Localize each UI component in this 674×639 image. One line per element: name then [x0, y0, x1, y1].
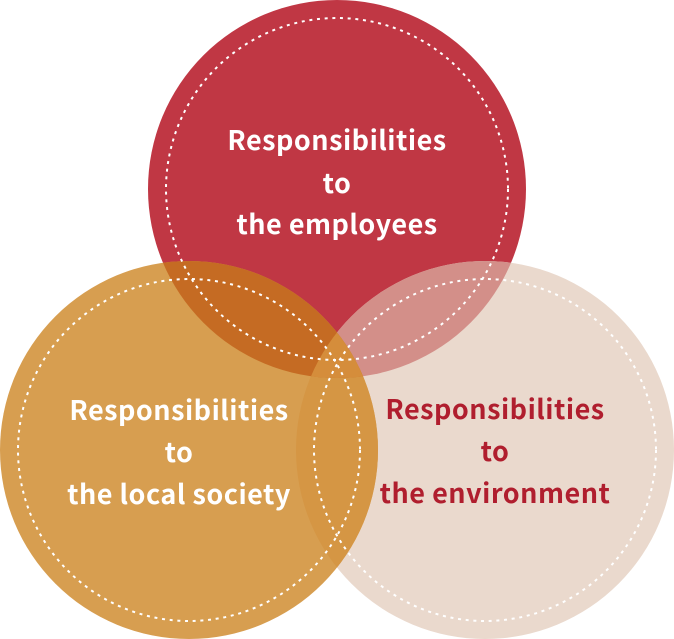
label: employees [227, 119, 447, 242]
overlap: employees and environment [337, 261, 511, 376]
label: environment [380, 388, 610, 511]
label: employees: Responsibilities [227, 119, 447, 158]
overlap: employees and local society [163, 261, 363, 378]
label: local society: the local society [67, 473, 291, 512]
label: environment: Responsibilities [385, 388, 605, 427]
label: employees: the employees [236, 203, 438, 242]
label: local society [67, 389, 291, 512]
dotted ring: local society [18, 279, 360, 621]
overlap: local society and environment [296, 376, 378, 568]
label: environment: the environment [380, 472, 610, 511]
label: employees: to [323, 162, 351, 201]
circle: environment (beige) [296, 261, 674, 639]
overlap: all three circles [311, 332, 362, 378]
label: local society: to [165, 431, 193, 470]
circle: local society (orange) [0, 261, 378, 639]
circle: employees (red) [148, 0, 526, 378]
dotted ring: employees [166, 18, 508, 360]
dotted ring: environment [314, 279, 656, 621]
label: local society: Responsibilities [69, 389, 289, 428]
label: environment: to [481, 430, 509, 469]
